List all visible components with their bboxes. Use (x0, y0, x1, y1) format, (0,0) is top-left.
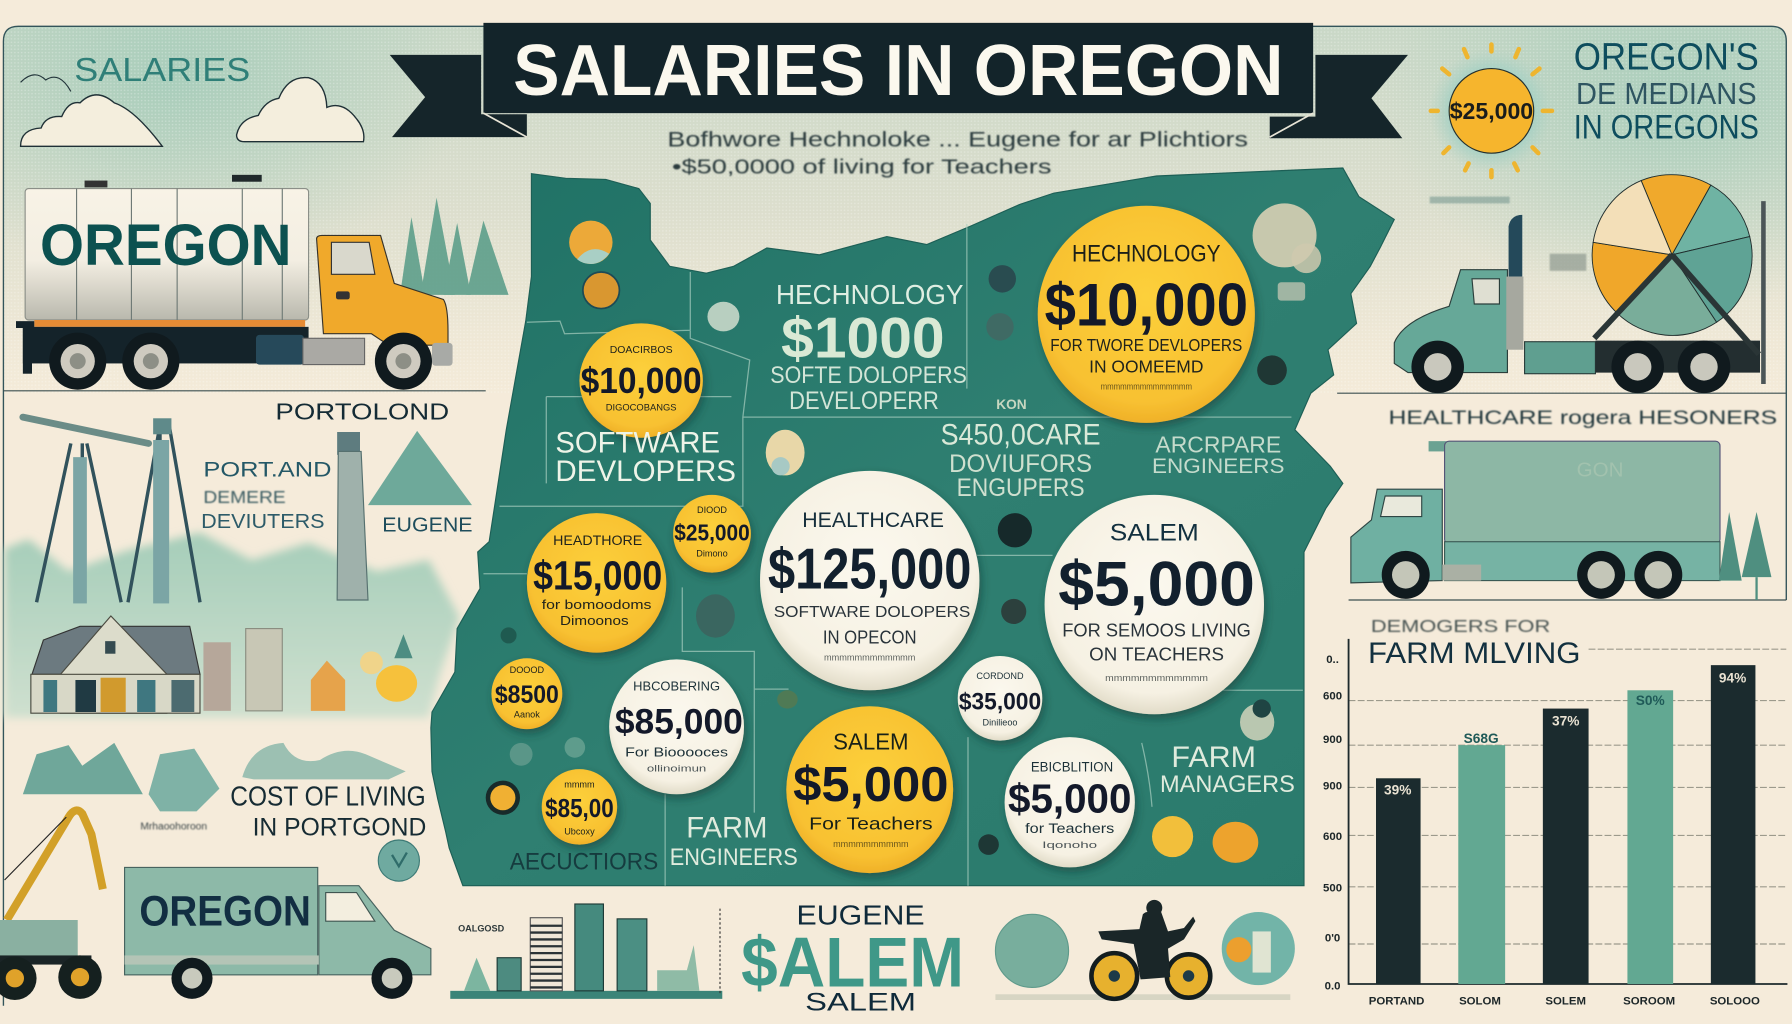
circle: $85,00: Ubcoxy (564, 826, 595, 836)
map labels: FARM (1171, 741, 1256, 774)
label: Portolond: PORTOLOND (275, 398, 449, 424)
icon: derricks (23, 417, 200, 603)
label: cost of living (140, 781, 426, 841)
subtitle: Bofhwore Hechnoloke ... Eugene for ar Plichtiors (667, 126, 1248, 151)
label: Portland developers: DEMERE (203, 487, 286, 507)
circle: $10,000 small (579, 323, 703, 438)
axis labels: 900 (1323, 734, 1342, 746)
circle: healthcare $125,000 (760, 471, 979, 690)
circle: Salem $5,000 yellow: $5,000 (793, 758, 949, 812)
circle: healthcare $15,000: HEADTHORE (553, 533, 642, 548)
truck: Oregon tanker (16, 175, 453, 390)
pie chart (1592, 175, 1752, 335)
circle: $8,500: DOOOD (510, 665, 544, 675)
clouds with salaries label: SALARIES (74, 52, 250, 89)
subtitle: •$50,0000 of living for Teachers (672, 156, 1051, 179)
label: Eugene Salem: SALEM (805, 988, 916, 1016)
label: cost of living: Mrhaoohoroon (140, 822, 207, 833)
circle: $85,000: For Biooooces (625, 746, 728, 760)
icon: house (31, 616, 200, 713)
axis labels: 600 (1323, 690, 1342, 702)
circle: healthcare $125,000: HEALTHCARE (802, 507, 944, 532)
icon: trees right (1719, 512, 1771, 600)
chart heading: DEMOGERS FOR (1371, 616, 1550, 636)
circle: $85,00: $85,00 (545, 793, 614, 823)
circle: $35,000: Dinilieoo (983, 718, 1018, 728)
circle: technology $10,000: FOR TWORE DEVLOPERS (1050, 335, 1242, 355)
chart heading (1368, 616, 1581, 670)
map labels: AECUCTIORS (510, 849, 658, 876)
circle: $8,500: Aanok (514, 710, 540, 720)
label: software developers: DEVLOPERS (555, 455, 736, 488)
circle: healthcare $125,000: $125,000 (768, 538, 971, 602)
map labels: ENGUPERS (957, 474, 1085, 502)
circle: healthcare $15,000: $15,000 (533, 553, 662, 599)
circle: $85,000: HBCOBERING (633, 679, 720, 693)
truck: green box truck: GON (1577, 459, 1623, 482)
circle: education $5,000: for Teachers (1025, 821, 1114, 836)
bar 2 (1458, 745, 1505, 984)
label: Portland developers: DEVIUTERS (201, 510, 325, 533)
map labels: SOFTE DOLOPERS (770, 362, 967, 389)
label: Eugene: EUGENE (382, 513, 473, 536)
icon: pine trees (400, 198, 509, 295)
map labels: DOVIUFORS (949, 450, 1092, 478)
circle: $10,000 small: DIGOCOBANGS (606, 402, 677, 412)
axis labels (1323, 654, 1760, 1008)
circle: $35,000: CORDOND (976, 671, 1024, 681)
axis labels: 0.. (1326, 654, 1339, 666)
map labels: $1000 (781, 307, 945, 371)
truck: Oregon van (125, 867, 431, 999)
axis labels: 0'0 (1325, 933, 1340, 945)
circle: healthcare $15,000: Dimoonos (560, 614, 629, 628)
circle: healthcare $125,000: IN OPECON (823, 626, 917, 647)
icon: mountain (368, 431, 472, 505)
label: Eugene Salem (741, 900, 964, 1016)
label: Portland developers: PORT.AND (203, 457, 331, 482)
mini city chart (450, 904, 722, 999)
landscape: hills behind derricks (5, 533, 459, 718)
icon: badge (995, 914, 1069, 987)
van lettering: OREGON (139, 888, 311, 935)
decorative ground (995, 994, 1290, 1000)
title: SALARIES IN OREGON (513, 31, 1283, 111)
circle: $85,000: $85,000 (615, 702, 743, 742)
circle: healthcare $15,000: for bomoodoms (542, 598, 651, 612)
bar values: S68G (1464, 731, 1499, 746)
axis labels: 0.0 (1325, 981, 1341, 993)
heading: Oregon's median: OREGON'S (1574, 36, 1759, 78)
map: Oregon (431, 168, 1394, 886)
map labels: MANAGERS (1160, 771, 1295, 798)
axis labels: PORTAND (1369, 996, 1424, 1008)
circle: $8,500 (491, 658, 562, 729)
icon: tractor rider (1091, 900, 1210, 999)
bar values: S0% (1636, 693, 1665, 708)
circle: technology $10,000: mmmmmmmmmmmmmm (1101, 382, 1192, 392)
map labels (510, 279, 1295, 876)
map labels: FARM (686, 812, 767, 845)
circle: education $5,000 (1005, 737, 1135, 867)
map labels: HECHNOLOGY (776, 279, 963, 310)
circle: technology $10,000: IN OOMEEMD (1089, 357, 1203, 377)
label: software developers: SOFTWARE (555, 427, 720, 460)
axis labels: SOLOM (1459, 996, 1501, 1008)
label: Eugene Salem: EUGENE (797, 900, 925, 931)
truck: green box truck (1351, 441, 1720, 599)
circle: $10,000 small: DOACIRBOS (610, 345, 673, 356)
heading: Oregon's median (1574, 36, 1759, 146)
axis labels: SOLOOO (1710, 996, 1760, 1008)
title banner (390, 23, 1408, 138)
sun value: $25,000 (1450, 98, 1533, 124)
circle: $35,000 (958, 656, 1042, 741)
circle: Salem $5,000 (1045, 495, 1264, 714)
circle: $10,000 small: $10,000 (581, 360, 702, 401)
icon: sun with median salary (1429, 45, 1554, 177)
bar 4 (1627, 690, 1673, 984)
map icons (486, 203, 1321, 863)
circle: Salem $5,000 yellow (786, 706, 953, 873)
label: cost of living: IN PORTGOND (253, 813, 426, 841)
circle: $35,000: $35,000 (959, 689, 1041, 716)
bar 1 (1376, 778, 1421, 984)
axis labels: SOROOM (1623, 996, 1675, 1008)
circle: healthcare $125,000: SOFTWARE DOLOPERS (774, 604, 970, 621)
circle: $8,500: $8500 (495, 681, 559, 709)
circle: technology $10,000: $10,000 (1045, 271, 1248, 339)
bar values: 94% (1719, 670, 1746, 685)
circle: Salem $5,000: $5,000 (1058, 550, 1255, 620)
circle: Salem $5,000: mmmmmmmmmmmm (1105, 673, 1208, 683)
circle: $25,000 small: $25,000 (674, 520, 750, 546)
circle: $85,00: mmmm (564, 779, 595, 789)
heading: Oregon's median: DE MEDIANS (1576, 76, 1757, 111)
bar values: 37% (1552, 714, 1579, 729)
circle: education $5,000: EBICBLITION (1031, 759, 1113, 774)
circle: education $5,000: Iqonoho (1042, 840, 1097, 850)
map labels: S450,0CARE (941, 419, 1101, 452)
label: cost of living: COST OF LIVING (230, 781, 426, 812)
map labels: ENGINEERS (670, 844, 798, 871)
circle: $85,00 (542, 769, 617, 845)
subtitle (667, 126, 1248, 179)
axis labels: 500 (1323, 882, 1342, 894)
circle: $25,000 small: Dimono (696, 549, 728, 559)
circle: healthcare $125,000: mmmmmmmmmmmm (824, 653, 915, 663)
circle: Salem $5,000: FOR SEMOOS LIVING (1062, 620, 1251, 641)
circle: $85,000: ollinoimun (647, 763, 706, 773)
circle: education $5,000: $5,000 (1008, 776, 1131, 822)
circle: technology $10,000: HECHNOLOGY (1072, 241, 1221, 268)
bar values: 39% (1384, 782, 1411, 797)
label: Portland developers (201, 457, 331, 533)
circle: technology $10,000 (1038, 206, 1255, 423)
label: healthcare: HEALTHCARE rogera HESONERS (1389, 407, 1777, 429)
circle: Salem $5,000 yellow: For Teachers (809, 814, 933, 834)
bar values (1384, 670, 1746, 797)
icon: colorful circle (1222, 912, 1295, 985)
map labels: ENGINEERS (1152, 453, 1285, 478)
icon: round badge (378, 840, 419, 881)
icon: crane (0, 810, 103, 1000)
chart heading: FARM MLVING (1368, 637, 1581, 670)
circle: Salem $5,000: SALEM (1110, 520, 1199, 547)
axis labels: 600 (1323, 831, 1342, 843)
icon: small buildings (203, 629, 417, 711)
label: Eugene Salem: $ALEM (741, 923, 964, 1002)
truck: pie chart carrier (1394, 175, 1766, 393)
bar 5 (1711, 665, 1755, 984)
icon: chimney (337, 432, 368, 600)
circle: $85,000 (609, 659, 744, 794)
circle: Salem $5,000 yellow: mmmmmmmmmm (833, 839, 909, 849)
heading: Oregon's median: IN OREGONS (1574, 108, 1759, 146)
map labels: DEVELOPERR (789, 387, 939, 415)
map labels: KON (996, 397, 1027, 412)
bar 3 (1543, 709, 1589, 984)
mini city chart: OALGOSD (458, 923, 505, 933)
circle: healthcare $15,000 (527, 513, 666, 653)
chart: farm moving bars (1323, 616, 1787, 1008)
tanker lettering: OREGON (40, 213, 291, 278)
label: software developers (555, 427, 736, 488)
clouds with salaries label (21, 52, 364, 146)
circle: Salem $5,000: ON TEACHERS (1089, 644, 1224, 665)
axis labels: 900 (1323, 781, 1342, 793)
map labels: ARCRPARE (1155, 432, 1281, 458)
axis labels: SOLEM (1545, 996, 1586, 1008)
circle: $25,000 small (673, 495, 751, 573)
icon: rocks (23, 743, 406, 811)
circle: $25,000 small: DIOOD (697, 505, 727, 515)
circle: Salem $5,000 yellow: SALEM (833, 729, 909, 755)
